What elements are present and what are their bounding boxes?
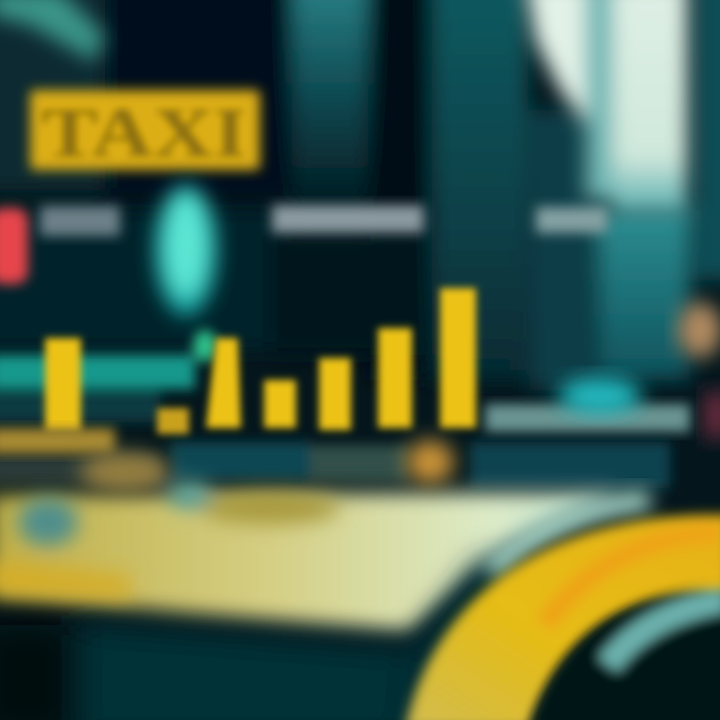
small bar	[157, 408, 189, 434]
pale reflection above hood	[490, 500, 650, 572]
table clutter	[0, 440, 454, 600]
bar 1	[45, 338, 81, 432]
city buildings	[0, 0, 720, 390]
bar 2	[206, 338, 241, 428]
bright sky gaps	[525, 0, 688, 215]
bar 6	[440, 288, 476, 428]
cyan light	[154, 184, 218, 316]
dark teal lower bands	[0, 442, 670, 488]
bar chart	[45, 288, 476, 434]
bar 5	[378, 328, 412, 428]
curved yellow taxi hood	[405, 515, 720, 720]
table surface	[0, 492, 620, 632]
taxi sign	[30, 90, 260, 172]
sign text: TAXI	[42, 95, 246, 172]
red light	[0, 208, 28, 284]
gold baseline	[0, 428, 115, 454]
grey signage bands	[40, 205, 608, 236]
bar 4	[319, 358, 351, 430]
bottom dark foreground	[0, 560, 520, 720]
teal street band	[0, 330, 217, 422]
dark wheel	[530, 590, 720, 720]
sign board	[30, 90, 260, 170]
teal sign top left	[0, 0, 105, 62]
bar 3	[264, 380, 296, 428]
grey street band and cyan glow	[485, 302, 720, 438]
